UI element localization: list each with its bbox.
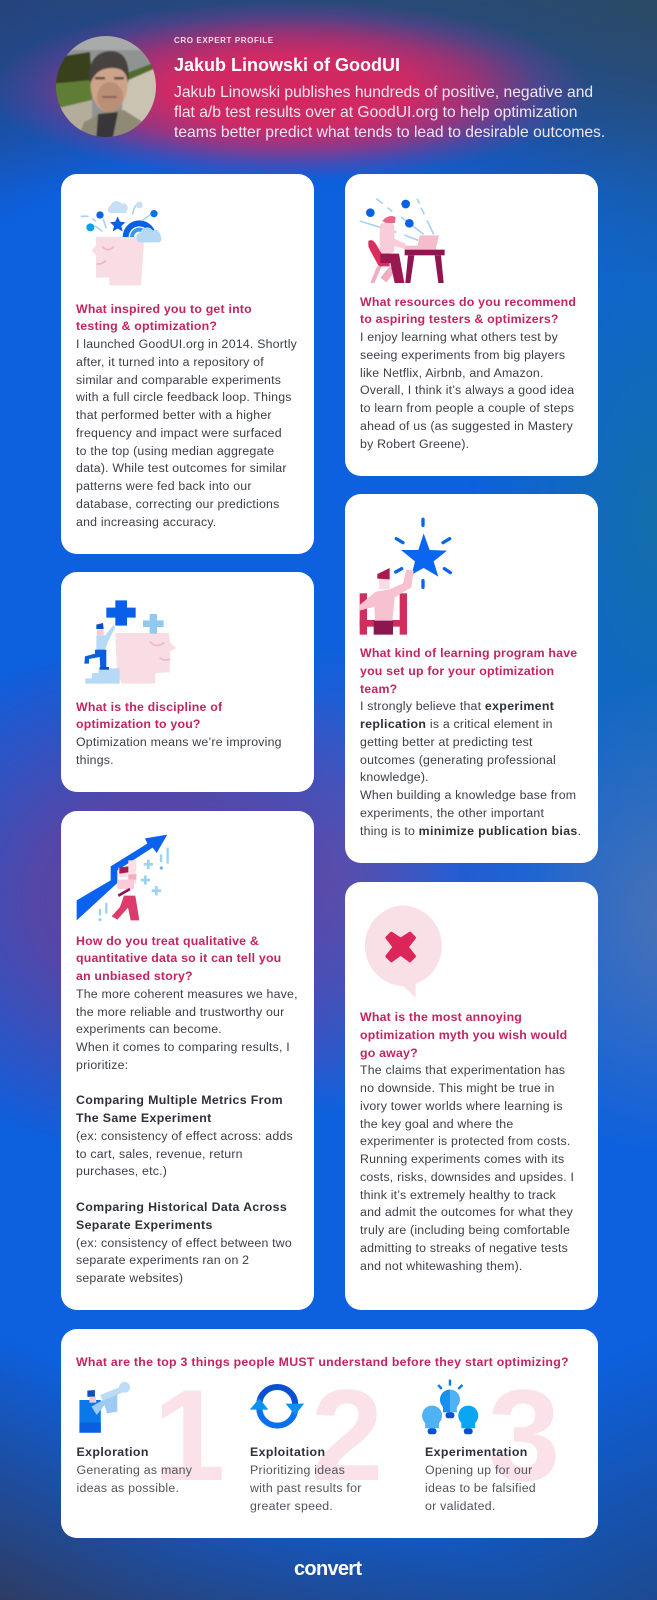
intro text: teams better predict what tends to lead to desirable outcomes. xyxy=(174,124,605,141)
panel: what resources xyxy=(345,174,598,476)
item: exploitation: greater speed. xyxy=(250,1499,333,1513)
question and answer: quantitative data so it can tell you xyxy=(76,951,281,965)
item: experimentation: Experimentation xyxy=(425,1445,528,1459)
icon: person pushing arrow upward xyxy=(76,834,169,922)
item: exploitation xyxy=(250,1445,362,1513)
question and answer: (ex: consistency of effect between two xyxy=(76,1236,292,1250)
question and answer: separate experiments ran on 2 xyxy=(76,1253,249,1267)
question and answer: Overall, I think it’s always a good idea xyxy=(360,383,574,397)
question and answer: What kind of learning program have xyxy=(360,646,577,660)
question and answer: an unbiased story? xyxy=(76,969,193,983)
item: exploration: ideas as possible. xyxy=(76,1481,179,1495)
question and answer: How do you treat qualitative & xyxy=(76,934,259,948)
question and answer: (ex: consistency of effect across: adds xyxy=(76,1129,293,1143)
item: experimentation: Opening up for our xyxy=(425,1463,532,1477)
question and answer: the key goal and where the xyxy=(360,1117,513,1131)
numeral 3: 3 xyxy=(488,1362,560,1508)
panel: what inspired you xyxy=(61,174,314,554)
question and answer: and admit the outcomes for what they xyxy=(360,1205,573,1219)
panel: qualitative and quantitative data xyxy=(61,811,314,1310)
item: exploitation: Exploitation xyxy=(250,1445,325,1459)
question and answer: Optimization means we’re improving xyxy=(76,735,282,749)
question and answer: When building a knowledge base from xyxy=(360,788,576,802)
question and answer: What is the most annoying xyxy=(360,1010,522,1024)
question and answer: after, it turned into a repository of xyxy=(76,355,264,369)
question and answer: knowledge). xyxy=(360,770,429,784)
numeral 1: 1 xyxy=(153,1362,225,1508)
item: exploration xyxy=(76,1445,192,1495)
question and answer: testing & optimization? xyxy=(76,319,217,333)
question and answer: I enjoy learning what others test by xyxy=(360,330,558,344)
header xyxy=(56,36,605,141)
item: exploitation: Prioritizing ideas xyxy=(250,1463,345,1477)
icon: head with ideas xyxy=(80,201,162,286)
question and answer: and not whitewashing them). xyxy=(360,1259,523,1273)
question and answer: prioritize: xyxy=(76,1058,128,1072)
panel: learning program xyxy=(345,494,598,863)
question and answer: Running experiments comes with its xyxy=(360,1152,564,1166)
question and answer: replication is a critical element in xyxy=(360,717,553,731)
question and answer: ivory tower worlds where learning is xyxy=(360,1099,563,1113)
question and answer: experiments can become. xyxy=(76,1022,222,1036)
question and answer: things. xyxy=(76,753,114,767)
question and answer: experimenter is protected from costs. xyxy=(360,1134,570,1148)
icon: speech bubble with X xyxy=(364,906,442,998)
question and answer: The more coherent measures we have, xyxy=(76,987,298,1001)
icon: person reaching for star xyxy=(360,518,452,635)
panel: top 3 things xyxy=(61,1329,598,1538)
section heading: What are the top 3 things people MUST understand before they start optimizing? xyxy=(76,1355,569,1369)
item: experimentation: or validated. xyxy=(425,1499,496,1513)
question and answer: When it comes to comparing results, I xyxy=(76,1040,290,1054)
expert name: Jakub Linowski of GoodUI xyxy=(174,55,400,75)
question and answer xyxy=(76,302,297,529)
question and answer: ahead of us (as suggested in Mastery xyxy=(360,419,573,433)
question and answer: outcomes (generating professional xyxy=(360,753,556,767)
question and answer: and increasing accuracy. xyxy=(76,515,216,529)
question and answer: Comparing Multiple Metrics From xyxy=(76,1093,283,1107)
question and answer xyxy=(360,1010,574,1273)
question and answer: What resources do you recommend xyxy=(360,294,576,308)
question and answer: purchases, etc.) xyxy=(76,1164,167,1178)
item: experimentation xyxy=(425,1445,536,1513)
question and answer: think it’s extremely healthy to track xyxy=(360,1188,556,1202)
icon: three light bulbs xyxy=(422,1380,478,1434)
question and answer: getting better at predicting test xyxy=(360,735,533,749)
question and answer: Comparing Historical Data Across xyxy=(76,1200,287,1214)
question and answer: to aspiring testers & optimizers? xyxy=(360,312,559,326)
question and answer: the more reliable and trustworthy our xyxy=(76,1005,284,1019)
question and answer: similar and comparable experiments xyxy=(76,373,281,387)
question and answer: What is the discipline of xyxy=(76,700,222,714)
question and answer: Separate Experiments xyxy=(76,1218,213,1232)
icon: person with telescope xyxy=(79,1382,130,1433)
question and answer: optimization myth you wish would xyxy=(360,1028,567,1042)
question and answer: go away? xyxy=(360,1046,418,1060)
question and answer: seeing experiments from big players xyxy=(360,348,565,362)
item: exploration: Generating as many xyxy=(76,1463,192,1477)
question and answer xyxy=(76,934,298,1285)
question and answer: no downside. This might be true in xyxy=(360,1081,555,1095)
item: exploration: Exploration xyxy=(76,1445,149,1459)
question and answer: to cart, sales, revenue, return xyxy=(76,1147,243,1161)
question and answer: I launched GoodUI.org in 2014. Shortly xyxy=(76,337,297,351)
panel: most annoying myth xyxy=(345,882,598,1310)
question and answer: you set up for your optimization xyxy=(360,664,554,678)
question and answer: What inspired you to get into xyxy=(76,302,252,316)
question and answer: data). While test outcomes for similar xyxy=(76,461,287,475)
question and answer: truly are (including being comfortable xyxy=(360,1223,570,1237)
intro text xyxy=(174,84,605,141)
question and answer: database, correcting our predictions xyxy=(76,497,279,511)
question and answer: optimization to you? xyxy=(76,717,201,731)
item: exploitation: with past results for xyxy=(250,1481,362,1495)
question and answer: to learn from people a couple of steps xyxy=(360,401,574,415)
question and answer: to the top (using median aggregate xyxy=(76,444,274,458)
intro text: flat a/b test results over at GoodUI.org to help optimization xyxy=(174,104,577,121)
question and answer: by Robert Greene). xyxy=(360,437,469,451)
eyebrow label: CRO EXPERT PROFILE xyxy=(174,36,274,45)
item: experimentation: ideas to be falsified xyxy=(425,1481,536,1495)
question and answer: team? xyxy=(360,682,397,696)
question and answer: separate websites) xyxy=(76,1271,183,1285)
panel: discipline of optimization xyxy=(61,572,314,792)
question and answer: The Same Experiment xyxy=(76,1111,212,1125)
question and answer: The claims that experimentation has xyxy=(360,1063,565,1077)
icon: figure reaching plus above head xyxy=(84,600,176,684)
intro text: Jakub Linowski publishes hundreds of positive, negative and xyxy=(174,84,593,101)
logo: convert: convert xyxy=(294,1558,361,1580)
question and answer: with a full circle feedback loop. Things xyxy=(76,390,292,404)
question and answer: like Netflix, Airbnb, and Amazon. xyxy=(360,366,544,380)
question and answer: admitting to streaks of negative tests xyxy=(360,1241,568,1255)
question and answer: I strongly believe that experiment xyxy=(360,699,554,713)
question and answer: costs, risks, downsides and upsides. I xyxy=(360,1170,574,1184)
portrait photo xyxy=(56,36,156,137)
question and answer xyxy=(360,294,576,451)
question and answer xyxy=(76,700,282,767)
question and answer: frequency and impact were surfaced xyxy=(76,426,282,440)
question and answer xyxy=(360,646,581,838)
question and answer: patterns were fed back into our xyxy=(76,479,252,493)
icon: person at laptop xyxy=(360,198,445,283)
question and answer: thing is to minimize publication bias. xyxy=(360,824,581,838)
question and answer: experiments, the other important xyxy=(360,806,544,820)
numeral 2: 2 xyxy=(311,1362,383,1508)
question and answer: that performed better with a higher xyxy=(76,408,272,422)
icon: cycle arrows xyxy=(250,1384,304,1429)
